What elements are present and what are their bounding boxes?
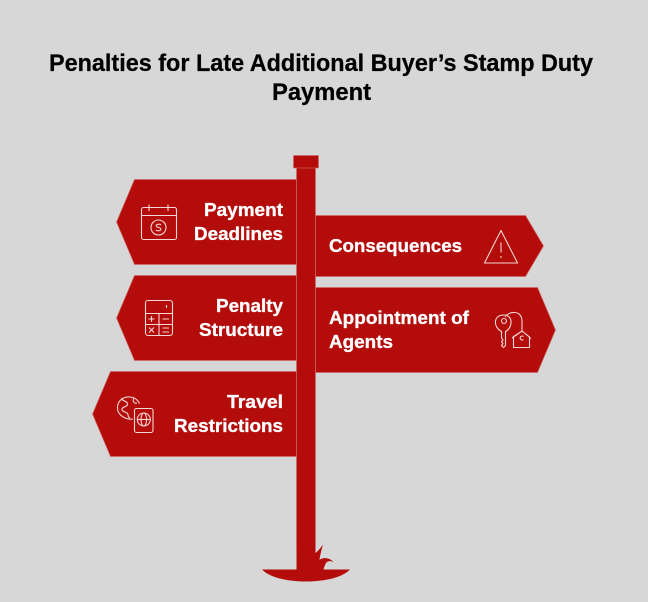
title <box>49 50 594 106</box>
signpost <box>262 156 350 582</box>
sign: Appointment of Agents <box>316 288 556 372</box>
sign: Travel Restrictions: Restrictions <box>174 416 283 436</box>
sign: Payment Deadlines <box>116 180 296 264</box>
icon: key with house tag <box>495 312 531 348</box>
sign: Travel Restrictions <box>92 372 296 456</box>
sign: Penalty Structure: Structure <box>199 320 283 340</box>
post <box>296 165 316 570</box>
icon: calendar with dollar <box>142 204 176 240</box>
icon: warning triangle <box>484 230 518 263</box>
icon: globe and passport <box>117 397 153 432</box>
sign: Travel Restrictions: Travel <box>227 392 283 412</box>
sign: Consequences: Consequences <box>329 236 462 256</box>
sign: Payment Deadlines: Payment <box>204 200 283 220</box>
sign: Consequences <box>316 216 544 276</box>
sign: Penalty Structure <box>116 276 296 360</box>
sign: Appointment of Agents: Appointment of <box>329 308 470 328</box>
title: Payment <box>272 79 371 106</box>
icon: calculator <box>146 300 172 336</box>
post cap <box>294 156 318 168</box>
post edges <box>296 168 316 546</box>
sign: Penalty Structure: Penalty <box>216 296 283 316</box>
sign: Appointment of Agents: Agents <box>329 332 393 352</box>
sign: Payment Deadlines: Deadlines <box>194 224 283 244</box>
title: Penalties for Late Additional Buyer’s Stamp Duty <box>49 50 594 77</box>
post base <box>262 544 350 582</box>
